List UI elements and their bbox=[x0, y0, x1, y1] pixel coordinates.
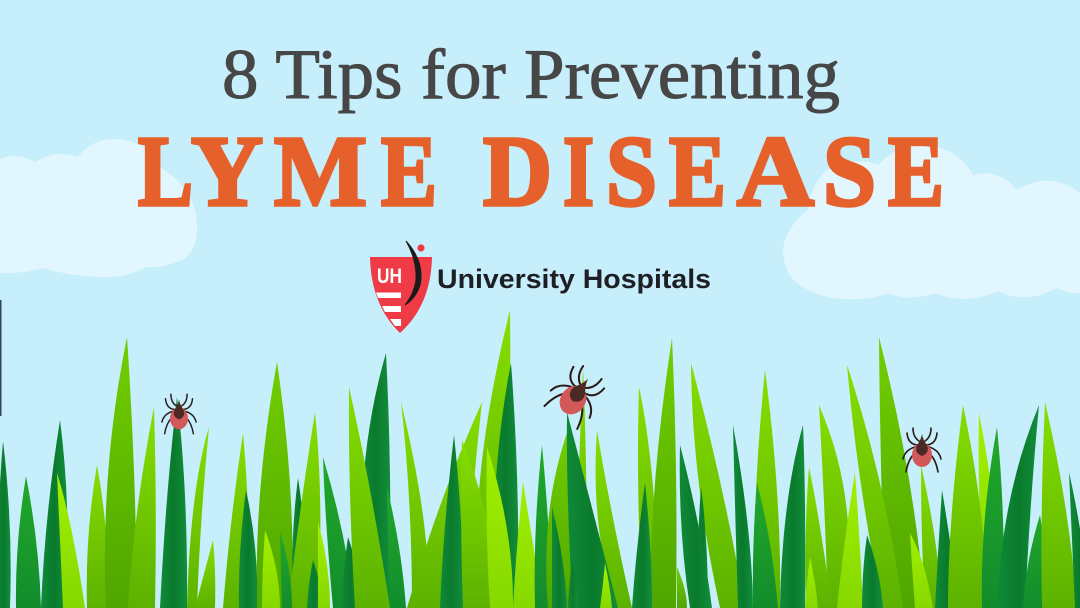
title: 8 Tips for Preventing: 8 Tips for Preventing bbox=[222, 36, 840, 114]
cloud: left bbox=[0, 139, 197, 277]
left edge strip bbox=[0, 300, 2, 416]
heading: LYME DISEASE: M bbox=[274, 115, 367, 227]
heading: LYME DISEASE: Y bbox=[191, 115, 263, 227]
heading: LYME DISEASE: S bbox=[823, 115, 876, 227]
logo: University Hospitals bbox=[370, 241, 711, 333]
icon: tick left bbox=[162, 394, 196, 434]
heading: LYME DISEASE: D bbox=[483, 115, 552, 227]
heading: LYME DISEASE: E bbox=[381, 115, 437, 227]
heading: LYME DISEASE: I bbox=[563, 115, 594, 227]
icon: shield bbox=[370, 257, 432, 333]
cloud: right bbox=[783, 145, 1080, 299]
icon: tick right bbox=[903, 428, 941, 472]
logo wordmark: University Hospitals bbox=[437, 264, 711, 294]
heading: LYME DISEASE: E bbox=[669, 115, 726, 227]
grass blades bbox=[0, 310, 1080, 608]
shield stripes bbox=[376, 292, 401, 326]
swoosh bbox=[405, 241, 421, 305]
shield letters: UH bbox=[377, 265, 402, 288]
heading: LYME DISEASE: A bbox=[737, 115, 814, 227]
dot bbox=[417, 244, 425, 252]
heading: LYME DISEASE: L bbox=[138, 115, 193, 227]
heading: LYME DISEASE: E bbox=[888, 115, 944, 227]
heading: LYME DISEASE: S bbox=[606, 115, 657, 227]
icon: tick center bbox=[541, 359, 612, 431]
